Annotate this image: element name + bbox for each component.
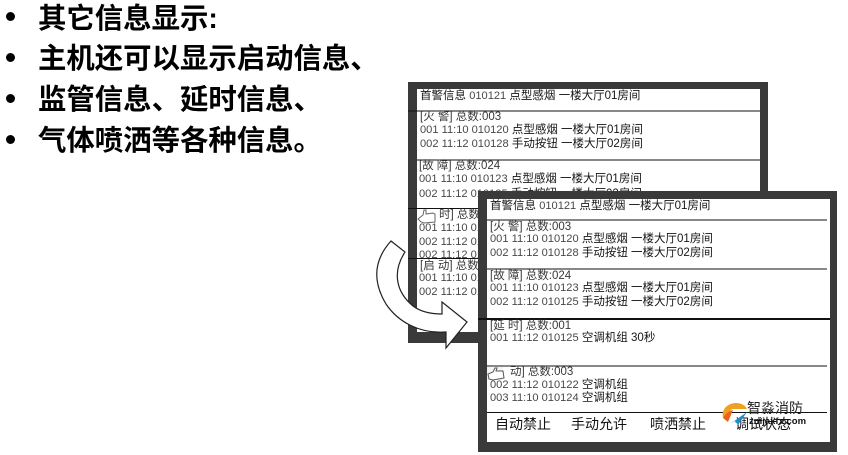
logo: Zhimiao Fire Protection watermark bbox=[723, 400, 806, 427]
panel: front display screen: 喷洒禁止 bbox=[650, 416, 706, 432]
panel: back display screen: 002 11:12 010125 bbox=[419, 249, 508, 261]
logo: Zhimiao Fire Protection watermark: 智淼消防 bbox=[747, 400, 803, 416]
panel: front display screen: 001 11:10 010123 点型感烟 一楼大厅01房间 bbox=[490, 280, 713, 294]
panel: back display screen: 002 11:12 010125 手动按钮 一楼大厅02房间 bbox=[419, 186, 642, 200]
panel: back display screen: 001 11:10 010122 bbox=[419, 272, 508, 284]
panel: front display screen: 调试状态 bbox=[735, 416, 791, 432]
arrow: curved white arrow from back screen to front screen bbox=[377, 241, 467, 348]
icon: hand pointer on front screen bbox=[487, 367, 504, 380]
panel: back display screen: 首警信息 010121 点型感烟 一楼大厅01房间 bbox=[420, 88, 640, 102]
panel: back display screen: 时] 总数:001 bbox=[439, 207, 502, 221]
panel: front display screen: 002 11:12 010128 手动按钮 一楼大厅02房间 bbox=[490, 245, 713, 259]
logo: Zhimiao Fire Protection watermark: zmjaxfx.com bbox=[749, 416, 806, 427]
panel: front display screen: [延 时] 总数:001 bbox=[490, 318, 571, 332]
panel: back display screen bbox=[408, 82, 768, 343]
panel: front display screen: 003 11:10 010124 空调机组 bbox=[490, 390, 628, 404]
panel: back display screen: 002 11:12 010125 bbox=[419, 236, 508, 248]
panel: front display screen: 自动禁止 bbox=[495, 416, 551, 432]
panel: back display screen: 002 11:12 010128 手动按钮 一楼大厅02房间 bbox=[420, 136, 643, 150]
panel: front display screen: [故 障] 总数:024 bbox=[490, 268, 572, 282]
panel: back display screen: [故 障] 总数:024 bbox=[419, 158, 501, 172]
panel: front display screen: 动] 总数:003 bbox=[510, 364, 573, 378]
panel: front display screen: 001 11:12 010125 空调机组 30秒 bbox=[490, 330, 655, 344]
bullet list: other information display: 主机还可以显示启动信息、 bbox=[38, 43, 379, 75]
panel: front display screen: 手动允许 bbox=[571, 416, 627, 432]
panel: front display screen: 002 11:12 010125 手动按钮 一楼大厅02房间 bbox=[490, 294, 713, 308]
bullet list: other information display bbox=[6, 3, 379, 157]
panel: back display screen: 001 11:10 010125 bbox=[419, 222, 508, 234]
panel: front display screen bbox=[478, 191, 837, 452]
panel: back display screen: 002 11:12 010124 bbox=[419, 286, 508, 298]
panel: back display screen: [火 警] 总数:003 bbox=[420, 109, 501, 123]
panel: front display screen: [火 警] 总数:003 bbox=[490, 219, 571, 233]
bullet list: other information display: 其它信息显示: bbox=[38, 3, 218, 35]
bullet list: other information display: 气体喷洒等各种信息。 bbox=[38, 125, 322, 157]
panel: back display screen: 001 11:10 010120 点型感烟 一楼大厅01房间 bbox=[420, 122, 643, 136]
panel: front display screen: 002 11:12 010122 空调机组 bbox=[490, 377, 628, 391]
panel: back display screen: 001 11:10 010123 点型感烟 一楼大厅01房间 bbox=[419, 171, 642, 185]
panel: back display screen: [启 动] 总数:003 bbox=[420, 258, 501, 272]
icon: hand pointer on back screen bbox=[418, 210, 435, 223]
panel: front display screen: 001 11:10 010120 点型感烟 一楼大厅01房间 bbox=[490, 231, 713, 245]
bullet list: other information display: 监管信息、延时信息、 bbox=[38, 84, 322, 116]
panel: front display screen: 首警信息 010121 点型感烟 一楼大厅01房间 bbox=[490, 198, 710, 212]
